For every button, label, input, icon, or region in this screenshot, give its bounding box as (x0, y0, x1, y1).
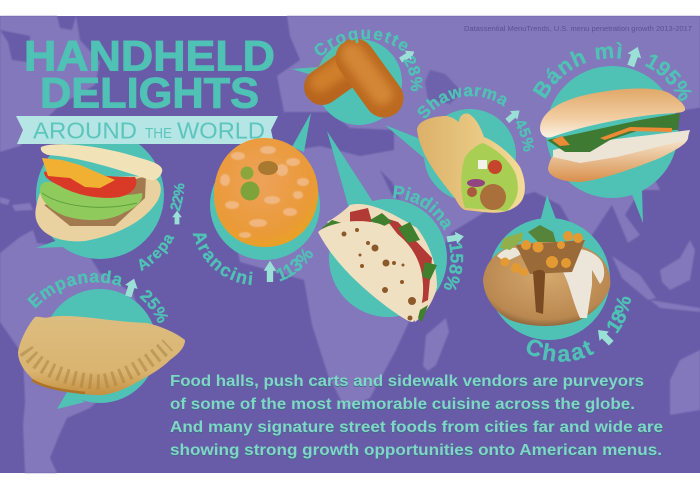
label: piadina 158%: 158% (444, 242, 464, 290)
food: empanada (18, 316, 185, 395)
label: banh mi 195%: 195% (645, 54, 692, 101)
label: shawarma 45% (418, 86, 534, 152)
bubble: arepa (36, 131, 164, 259)
bubble: arancini (210, 113, 320, 260)
title: HANDHELD (24, 32, 275, 80)
body text (170, 373, 663, 459)
ribbon: around the world: WORLD (177, 118, 265, 144)
source note: Datassential MenuTrends, U.S. menu penetration growth 2013-2017 (464, 24, 692, 33)
ribbon: around the world: AROUND (33, 118, 137, 144)
label: chaat 18%: Chaat (526, 340, 594, 362)
bubble: piadina (327, 131, 447, 317)
food: shawarma (417, 113, 525, 213)
label: banh mi 195%: Bánh mì (532, 42, 622, 99)
food: chaat (483, 225, 610, 326)
label: arepa 22% (139, 184, 184, 272)
title: DELIGHTS (40, 70, 259, 118)
bubble: shawarma (385, 109, 516, 201)
label: banh mi 195% (532, 42, 692, 101)
label: piadina 158% (393, 185, 464, 290)
label: empanada 25%: Empanada (27, 270, 122, 308)
ribbon: around the world (16, 116, 278, 144)
label: piadina 158%: Piadina (393, 185, 451, 230)
title (24, 32, 275, 118)
ribbon: around the world: THE (145, 125, 172, 142)
label: empanada 25%: 25% (139, 290, 168, 324)
label: empanada 25% (27, 270, 168, 324)
body text: of some of the most memorable cuisine across the globe. (170, 396, 635, 413)
bubble: croquette (292, 39, 402, 125)
label: chaat 18% (526, 296, 631, 362)
bubble: chaat (488, 195, 610, 340)
food: arancini (214, 138, 318, 247)
body text: Food halls, push carts and sidewalk vendors are purveyors (170, 373, 644, 390)
label: arancini 113%: Arancini (192, 233, 253, 286)
label: arepa 22%: 22% (170, 184, 184, 212)
label: arancini 113% (192, 233, 313, 286)
body text: And many signature street foods from cities far and wide are (170, 419, 663, 436)
label: croquette 28%: 28% (403, 56, 422, 92)
label: arancini 113%: 113% (276, 248, 313, 282)
label: croquette 28% (314, 30, 422, 92)
food: arepa (35, 144, 162, 241)
label: shawarma 45%: Shawarma (418, 86, 507, 118)
body text: showing strong growth opportunities onto American menus. (170, 442, 662, 459)
bubble: banh mi (546, 66, 678, 223)
bubble: empanada (43, 289, 157, 409)
label: croquette 28%: Croquette (314, 30, 408, 56)
label: arepa 22%: Arepa (139, 235, 174, 272)
food: croquette (320, 54, 384, 98)
label: shawarma 45%: 45% (516, 121, 534, 152)
label: chaat 18%: 18% (608, 296, 631, 334)
food: banh mi (540, 88, 690, 182)
food: piadina (318, 204, 437, 322)
